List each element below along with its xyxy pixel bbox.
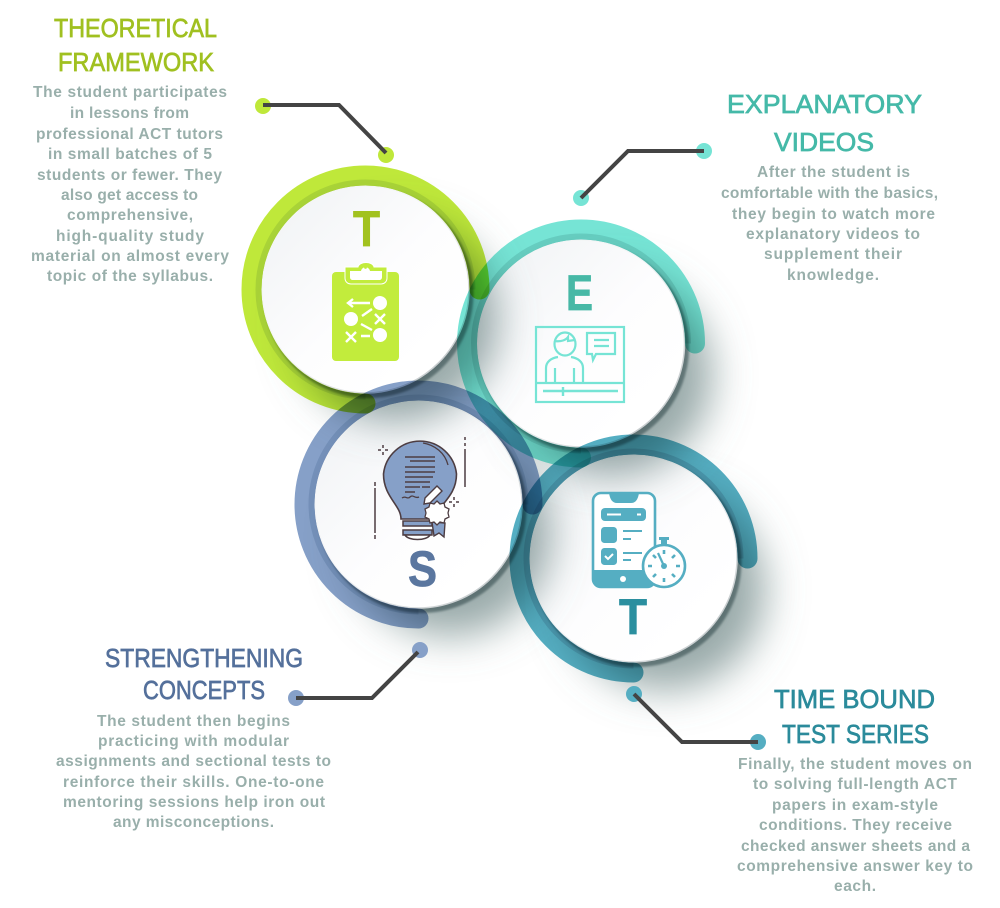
heading: time bound test series: TEST SERIES	[782, 721, 929, 749]
body: theoretical framework: in lessons from	[70, 105, 189, 122]
body: theoretical framework: in small batches of 5	[48, 146, 212, 163]
text block: theoretical framework	[31, 15, 229, 285]
body: time bound test series: comprehensive answer key to	[737, 858, 973, 875]
ring: green	[252, 176, 480, 404]
icon: video lesson	[536, 327, 624, 402]
letter: T teal: T	[619, 589, 647, 645]
body: theoretical framework: professional ACT tutors	[36, 126, 223, 143]
letter: S: S	[408, 541, 437, 597]
connector: theoretical	[255, 98, 394, 163]
body: theoretical framework: The student participates	[33, 84, 227, 101]
heading: strengthening concepts	[105, 645, 303, 705]
body: time bound test series	[737, 756, 973, 895]
body: theoretical framework: high-quality study	[56, 228, 204, 245]
heading: strengthening concepts: STRENGTHENING	[105, 645, 303, 673]
heading: theoretical framework: FRAMEWORK	[58, 49, 214, 77]
body: explanatory videos: supplement their	[764, 246, 902, 263]
disc and shadow: theoretical	[262, 186, 497, 421]
body: strengthening concepts: reinforce their skills. One-to-one	[63, 774, 324, 791]
heading: time bound test series: TIME BOUND	[774, 686, 935, 714]
body: theoretical framework	[31, 84, 229, 285]
disc and shadow: strengthening	[315, 401, 550, 636]
body: explanatory videos	[721, 164, 938, 284]
body: explanatory videos: explanatory videos to	[746, 226, 920, 243]
body: strengthening concepts: mentoring sessions help iron out	[63, 794, 325, 811]
heading: time bound test series	[774, 686, 935, 749]
text block: explanatory videos	[721, 91, 938, 284]
body: theoretical framework: comprehensive,	[67, 207, 193, 224]
text block: time bound test series	[737, 686, 973, 895]
body: time bound test series: to solving full-length ACT	[753, 776, 958, 793]
heading: theoretical framework	[54, 15, 217, 77]
body: explanatory videos: they begin to watch more	[732, 206, 935, 223]
connector: strengthening	[288, 642, 428, 706]
disc and shadow: time bound	[530, 455, 765, 690]
body: theoretical framework: material on almost every	[31, 248, 229, 265]
body: strengthening concepts: The student then begins	[97, 713, 290, 730]
icon: phone with stopwatch	[593, 493, 685, 587]
body: strengthening concepts: practicing with modular	[98, 733, 289, 750]
body: theoretical framework: students or fewer. They	[37, 167, 222, 184]
body: explanatory videos: comfortable with the basics,	[721, 185, 938, 202]
body: time bound test series: Finally, the student moves on	[738, 756, 972, 773]
letter: E: E	[566, 265, 593, 321]
body: time bound test series: conditions. They receive	[759, 817, 952, 834]
body: theoretical framework: also get access to	[61, 187, 198, 204]
body: time bound test series: each.	[834, 878, 876, 895]
connector: time bound	[626, 686, 766, 750]
disc and shadow: explanatory	[478, 240, 712, 475]
letter: T green: T	[353, 201, 380, 257]
body: time bound test series: papers in exam-style	[772, 797, 938, 814]
icon: clipboard with game plan	[332, 262, 399, 361]
connector: explanatory	[573, 143, 712, 206]
ring: teal	[467, 230, 695, 458]
body: theoretical framework: topic of the syllabus.	[47, 268, 213, 285]
text block: strengthening concepts	[56, 645, 331, 831]
body: explanatory videos: After the student is	[757, 164, 910, 181]
body: strengthening concepts: assignments and sectional tests to	[56, 753, 331, 770]
heading: theoretical framework: THEORETICAL	[54, 15, 217, 43]
ring: blue	[304, 390, 532, 618]
ring: dark teal	[520, 444, 748, 672]
heading: explanatory videos: EXPLANATORY	[727, 91, 922, 119]
body: strengthening concepts	[56, 713, 331, 831]
body: time bound test series: checked answer sheets and a	[741, 838, 970, 855]
heading: strengthening concepts: CONCEPTS	[143, 677, 265, 705]
body: explanatory videos: knowledge.	[787, 267, 879, 284]
icon: light bulb with certificate	[375, 437, 465, 540]
heading: explanatory videos	[727, 91, 922, 157]
heading: explanatory videos: VIDEOS	[774, 129, 874, 157]
body: strengthening concepts: any misconceptions.	[113, 814, 274, 831]
